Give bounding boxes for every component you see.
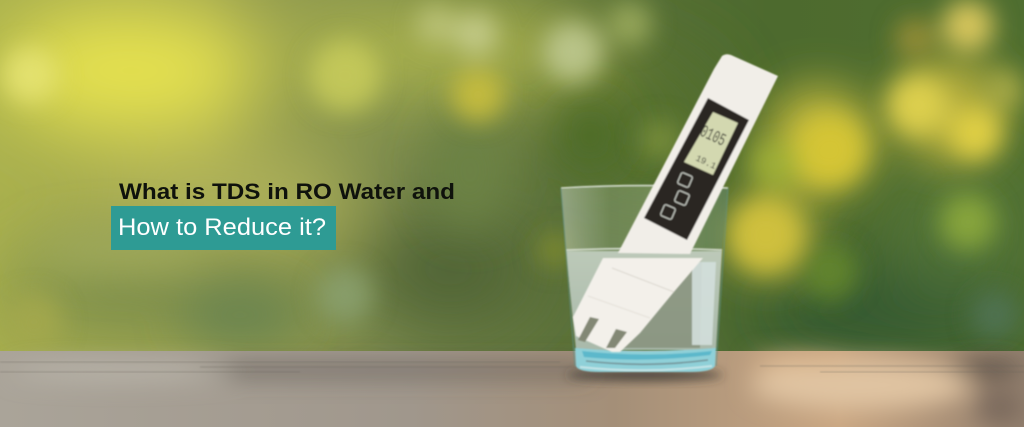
TDS meter [573,54,778,352]
glass upper, air section [561,186,728,251]
water body [566,251,722,350]
LCD screen: 0105 [696,123,728,152]
black display panel [644,98,749,240]
meter upper body [618,54,778,254]
teal title highlight [111,206,336,250]
LCD screen [684,112,738,175]
title line 1: What is TDS in RO Water and [119,179,455,204]
glass of water [561,186,728,372]
LCD screen: 19.1 [694,154,718,172]
teal glass base [575,348,716,372]
teal title highlight: How to Reduce it? [118,214,326,241]
title [111,179,455,250]
probe slots [578,317,599,342]
meter buttons [660,172,693,220]
meter lower probe [573,258,703,352]
wooden table [0,351,1024,427]
glass rim and water line [561,186,728,250]
